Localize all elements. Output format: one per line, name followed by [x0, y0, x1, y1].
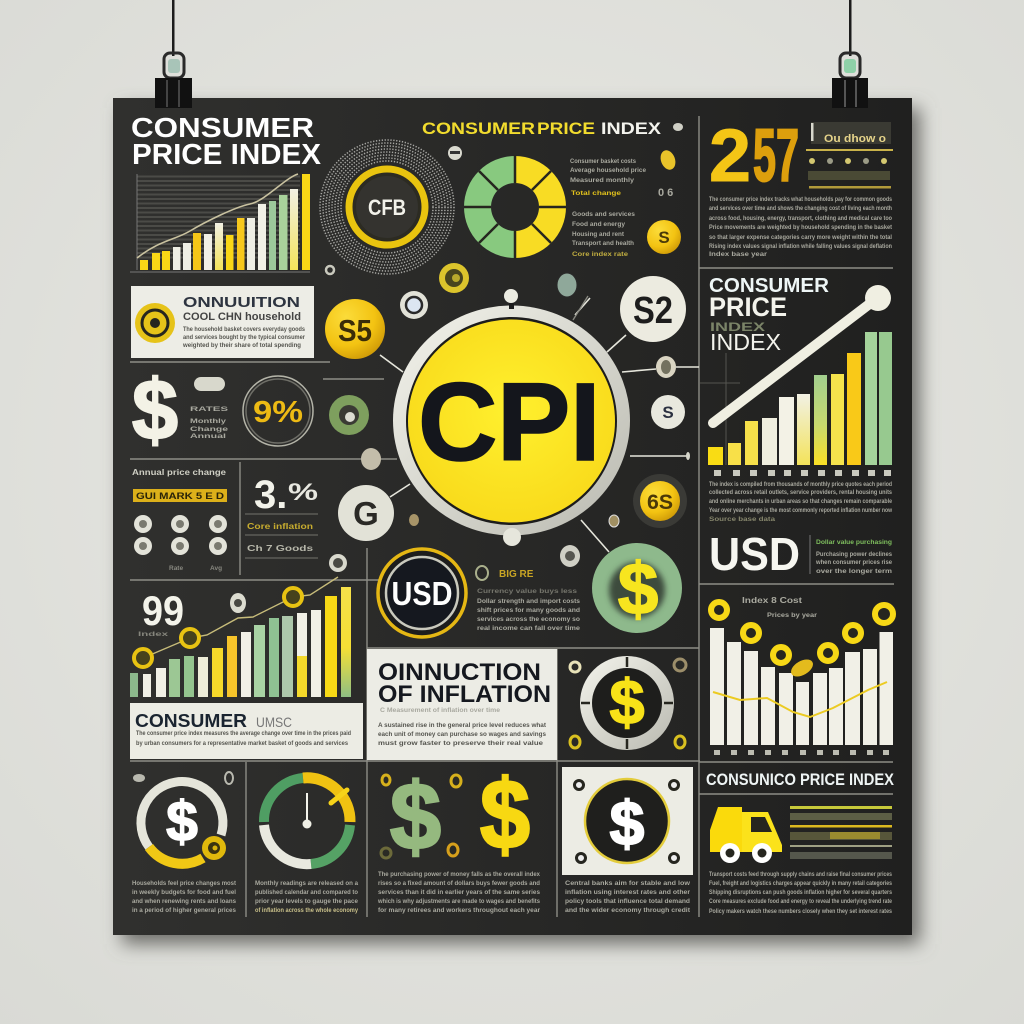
text block: right chart notes: Source base data	[709, 516, 775, 523]
icon: large white dollar: $	[132, 363, 178, 458]
text block: right chart notes: Year over year change is the most commonly reported inflation number now	[709, 507, 893, 514]
coin: S5: S5	[338, 313, 372, 348]
text block: gauge two: prior year levels to gauge the pace	[255, 898, 358, 905]
donut chart: green and yellow segments	[464, 155, 566, 259]
text block: gauge two: of inflation across the whole economy	[255, 907, 358, 914]
text block: dollar coin: and the wider economy through credit	[565, 907, 691, 914]
card: function of inflation: A sustained rise in the general price level reduces what	[378, 722, 547, 729]
text block: USD medallion notes: BIG RE	[499, 569, 534, 580]
big number 257: 57	[753, 114, 799, 197]
text block: dollar coin: inflation using interest rates and other	[565, 889, 690, 896]
icon: tiny oval	[609, 515, 619, 527]
icon: left hanging clip	[155, 0, 192, 108]
mini stats beside dollar	[190, 377, 229, 440]
central CPI badge: C	[418, 361, 497, 484]
icon: small oval	[656, 356, 676, 378]
coin: G	[338, 485, 394, 541]
icon: yellow ring	[439, 263, 469, 293]
icon: small ivory ring	[400, 291, 428, 319]
poster panel	[113, 98, 912, 935]
text block: donut notes: Total change	[571, 190, 621, 197]
text block: dollars	[377, 871, 540, 914]
text block: top right paragraph: Index base year	[709, 251, 768, 258]
bar chart: lower left rising bars	[130, 554, 351, 697]
USD medallion	[378, 549, 466, 637]
stat ring: 9 percent: 9%	[253, 394, 303, 429]
text block: truck notes: Shipping disruptions can push goods inflation higher for several quarters	[709, 889, 892, 896]
text block: gauge one: in a period of higher general prices	[132, 907, 236, 914]
USD medallion: USD	[392, 575, 452, 612]
text block: gauge one	[132, 880, 237, 914]
coin: 6S: 6S	[647, 491, 673, 514]
card: function of inflation: OINNUCTION	[378, 659, 541, 686]
card: consumption intro: The household basket covers everyday goods	[183, 326, 305, 333]
dollar dial: $	[609, 668, 645, 738]
coin: S ivory	[651, 395, 685, 429]
text block: donut notes: Consumer basket costs	[570, 158, 636, 165]
heading: right consumer price index: PRICE	[709, 292, 787, 322]
gauge: white and yellow dollar ring	[133, 772, 233, 864]
icons: small coins near donut: S	[658, 228, 670, 247]
card: function of inflation	[367, 649, 557, 760]
icons: green and yellow dollars: $	[480, 759, 530, 869]
icon grid: six rings: Avg	[210, 565, 222, 572]
coin: S2: S2	[633, 290, 673, 332]
legend: left mid heading: GUI MARK 5 E D	[136, 491, 225, 501]
mini stats beside dollar: Annual	[190, 433, 226, 440]
mini stats beside dollar: Monthly	[190, 418, 227, 425]
coin: S5	[325, 299, 385, 359]
text block: dollars: services than it did in earlier years of the same series	[378, 889, 540, 896]
big number 257: 2	[709, 114, 751, 197]
text block: donut notes: Food and energy	[572, 221, 625, 228]
stat strip beside number: Ou dhow o	[824, 133, 886, 145]
icon: yellow target	[135, 303, 175, 343]
coin: S2	[620, 276, 686, 342]
icon: tiny tan oval	[409, 514, 419, 526]
text block: USD medallion notes: shift prices for many goods and	[477, 607, 580, 614]
dial: CFB dotted ring: CFB	[368, 195, 406, 220]
title: consumer price index: CONSUMER	[131, 112, 314, 143]
stat: 3 percent: Core inflation	[247, 522, 313, 531]
icon: delivery truck	[710, 807, 782, 863]
text block: donut notes: Goods and services	[572, 211, 635, 218]
text block: dollars: for many retirees and workers throughout each year	[378, 907, 540, 914]
heading: lower right consumer price index: CONSUNICO PRICE INDEX	[706, 770, 895, 789]
legend: left mid heading: Annual price change	[132, 468, 227, 477]
dial: CFB dotted ring	[320, 140, 454, 274]
card: consumption intro	[131, 286, 314, 358]
card: consumer umsc: The consumer price index measures the average change over time in the prices paid	[136, 730, 351, 737]
text block: gauge two: published calendar and compared to	[255, 889, 358, 896]
text block: donut notes: Average household price	[570, 167, 646, 174]
central CPI badge: I	[570, 361, 601, 484]
heading: right consumer price index	[709, 275, 830, 355]
coin: 6S	[633, 474, 687, 528]
card: function of inflation: must grow faster to preserve their real value	[378, 740, 543, 747]
coin: G: G	[353, 495, 379, 532]
stat: 3 percent: Ch 7 Goods	[247, 544, 314, 553]
text block: dollars: rises so a fixed amount of dollars buys fewer goods and	[378, 880, 540, 887]
icon grid: six rings	[134, 515, 227, 572]
stat strip beside number	[806, 122, 893, 188]
bar chart: white bars with yellow rings: Prices by year	[767, 612, 818, 619]
knob: left line	[361, 448, 381, 470]
icons: green and yellow dollars	[381, 759, 530, 870]
coin: green dollar	[592, 543, 682, 633]
heading: top consumer price index: INDEX	[601, 119, 662, 138]
icons: right chart axis	[714, 470, 891, 476]
icons: small coins near donut: 0 6	[658, 187, 673, 199]
big number 257	[709, 114, 799, 197]
heading: right consumer price index: INDEX	[710, 320, 765, 334]
text block: gauge two	[255, 880, 358, 914]
text block: donut notes: Housing and rent	[572, 231, 625, 238]
mini stats beside dollar: Change	[190, 426, 229, 433]
bar chart: top left rising bars	[130, 174, 310, 272]
legend: left mid heading	[132, 468, 227, 502]
text block: top right paragraph: so that larger expense categories carry more weight within the total	[709, 234, 892, 241]
coin: S ivory: S	[662, 403, 674, 422]
icon grid: six rings: Rate	[169, 565, 183, 572]
card: consumption intro: COOL CHN household	[183, 311, 301, 323]
text block: truck notes: Core measures exclude food and energy to reveal the underlying trend rate	[709, 898, 892, 905]
text block: donut notes: Core index rate	[572, 251, 628, 258]
heading: right consumer price index: INDEX	[710, 329, 781, 355]
bar chart: white bars with yellow rings: Index 8 Cost	[742, 596, 802, 605]
central CPI badge: P	[497, 361, 570, 484]
card: consumption intro: weighted by their share of total spending	[182, 342, 301, 349]
text block: right chart notes: The index is compiled from thousands of monthly price quotes each period	[709, 481, 892, 488]
lines: truck legend	[790, 806, 892, 859]
mini stats beside dollar: RATES	[190, 406, 229, 413]
icon: right hanging clip	[832, 0, 868, 108]
card: consumer umsc: UMSC	[256, 714, 292, 730]
text block: truck notes	[709, 871, 892, 915]
knob: spoke end	[686, 452, 690, 460]
central CPI badge	[393, 306, 630, 536]
text block: truck notes: Fuel, freight and logistics charges appear quickly in many retail categories	[709, 880, 892, 887]
card: consumption intro: and services bought by the typical consumer	[183, 334, 305, 341]
gauge: tri-colour clock	[264, 778, 350, 864]
title: consumer price index	[131, 112, 322, 171]
icon: grey ring	[557, 273, 577, 297]
text block: USD notes: over the longer term	[816, 568, 892, 575]
text block: gauge one: Households feel price changes most	[132, 880, 237, 887]
dollar dial	[570, 656, 686, 750]
gauge: white and yellow dollar ring: $	[166, 790, 198, 854]
heading: top consumer price index: PRICE	[537, 119, 595, 138]
text block: USD medallion notes: Dollar strength and import costs	[477, 598, 580, 605]
card: function of inflation: OF INFLATION	[378, 681, 551, 708]
text block: top right paragraph	[709, 196, 893, 258]
heading: right consumer price index: CONSUMER	[709, 275, 830, 297]
text block: USD medallion notes: Currency value buys less	[477, 588, 577, 595]
card: function of inflation: C Measurement of inflation over time	[380, 707, 500, 714]
card: white dollar coin	[562, 767, 693, 875]
text block: USD medallion notes	[476, 566, 580, 632]
text block: right chart notes	[709, 481, 893, 523]
text block: dollars: The purchasing power of money falls as the overall index	[378, 871, 540, 878]
card: white dollar coin: $	[610, 790, 644, 859]
card: consumer umsc: CONSUMER	[135, 711, 247, 731]
stat: 3 percent: 3.	[254, 473, 287, 517]
card: consumption intro: ONNUUITION	[183, 294, 300, 311]
icon: small silver button	[560, 545, 580, 567]
poster shadow	[122, 108, 920, 944]
stat: 3 percent: %	[288, 479, 318, 506]
stat ring: 9 percent	[243, 376, 313, 446]
coin: green dollar: $	[618, 549, 658, 630]
bar chart: white bars with yellow rings	[710, 596, 893, 755]
text block: right chart notes: collected across retail outlets, service providers, rental housing units	[709, 489, 892, 496]
text block: donut notes: Measured monthly	[570, 177, 634, 184]
bar chart: right rising bars with arrow	[700, 285, 892, 465]
card: function of inflation: each unit of money can purchase so wages and savings	[378, 731, 546, 738]
heading: top consumer price index	[422, 119, 662, 138]
coin: green button	[329, 395, 369, 435]
icons: small coins near donut	[326, 123, 683, 274]
text block: top right paragraph: across food, housing, energy, transport, clothing and medical care too	[709, 215, 892, 222]
USD label: USD	[709, 528, 800, 580]
text block: truck notes: Policy makers watch these numbers closely when they set interest rates	[709, 908, 892, 915]
text block: USD notes: Dollar value purchasing	[816, 539, 892, 546]
heading: top consumer price index: CONSUMER	[422, 119, 535, 138]
text block: top right paragraph: The consumer price index tracks what households pay for common goods	[709, 196, 892, 203]
icons: green and yellow dollars: $	[390, 764, 441, 870]
text block: top right paragraph: Price movements are weighted by household spending in the basket	[709, 224, 893, 231]
text block: USD notes	[815, 539, 892, 575]
text block: truck notes: Transport costs feed through supply chains and raise final consumer prices	[709, 871, 892, 878]
text block: dollar coin	[565, 880, 691, 914]
text block: USD notes: Purchasing power declines	[816, 551, 892, 558]
knob: bottom	[503, 528, 521, 546]
text block: USD notes: when consumer prices rise	[815, 559, 892, 566]
connectors: badge spokes	[380, 298, 699, 552]
text block: gauge one: in weekly budgets for food and fuel	[132, 889, 236, 896]
icon: needle	[573, 296, 588, 320]
stat: 99: Index	[138, 631, 169, 638]
text block: gauge one: and when renewing rents and loans	[132, 898, 236, 905]
text block: USD medallion notes: services across the economy so	[477, 616, 580, 623]
text block: top right paragraph: Rising index values signal inflation while falling values signal deflation	[709, 243, 892, 250]
text block: dollar coin: Central banks aim for stable and low	[565, 880, 691, 887]
stat: 3 percent	[245, 473, 318, 558]
stat: 99: 99	[142, 587, 184, 634]
icon: top knob	[504, 289, 518, 309]
text block: right chart notes: and online merchants in urban areas so that changes remain comparable	[709, 498, 892, 505]
panel dividers	[130, 116, 894, 917]
card: consumer umsc	[130, 703, 363, 759]
text block: dollars: which is why adjustments are made to wages and benefits	[377, 898, 540, 905]
text block: USD medallion notes: real income can fall over time	[477, 625, 580, 632]
text block: donut notes: Transport and health	[572, 240, 634, 247]
title: consumer price index: PRICE INDEX	[132, 139, 322, 171]
text block: gauge two: Monthly readings are released on a	[255, 880, 358, 887]
text block: donut notes	[570, 158, 646, 258]
text block: top right paragraph: and services over time and shows the changing cost of living each month	[709, 205, 892, 212]
text block: dollar coin: policy tools that influence total demand	[565, 898, 690, 905]
card: consumer umsc: by urban consumers for a representative market basket of goods and services	[136, 740, 348, 747]
